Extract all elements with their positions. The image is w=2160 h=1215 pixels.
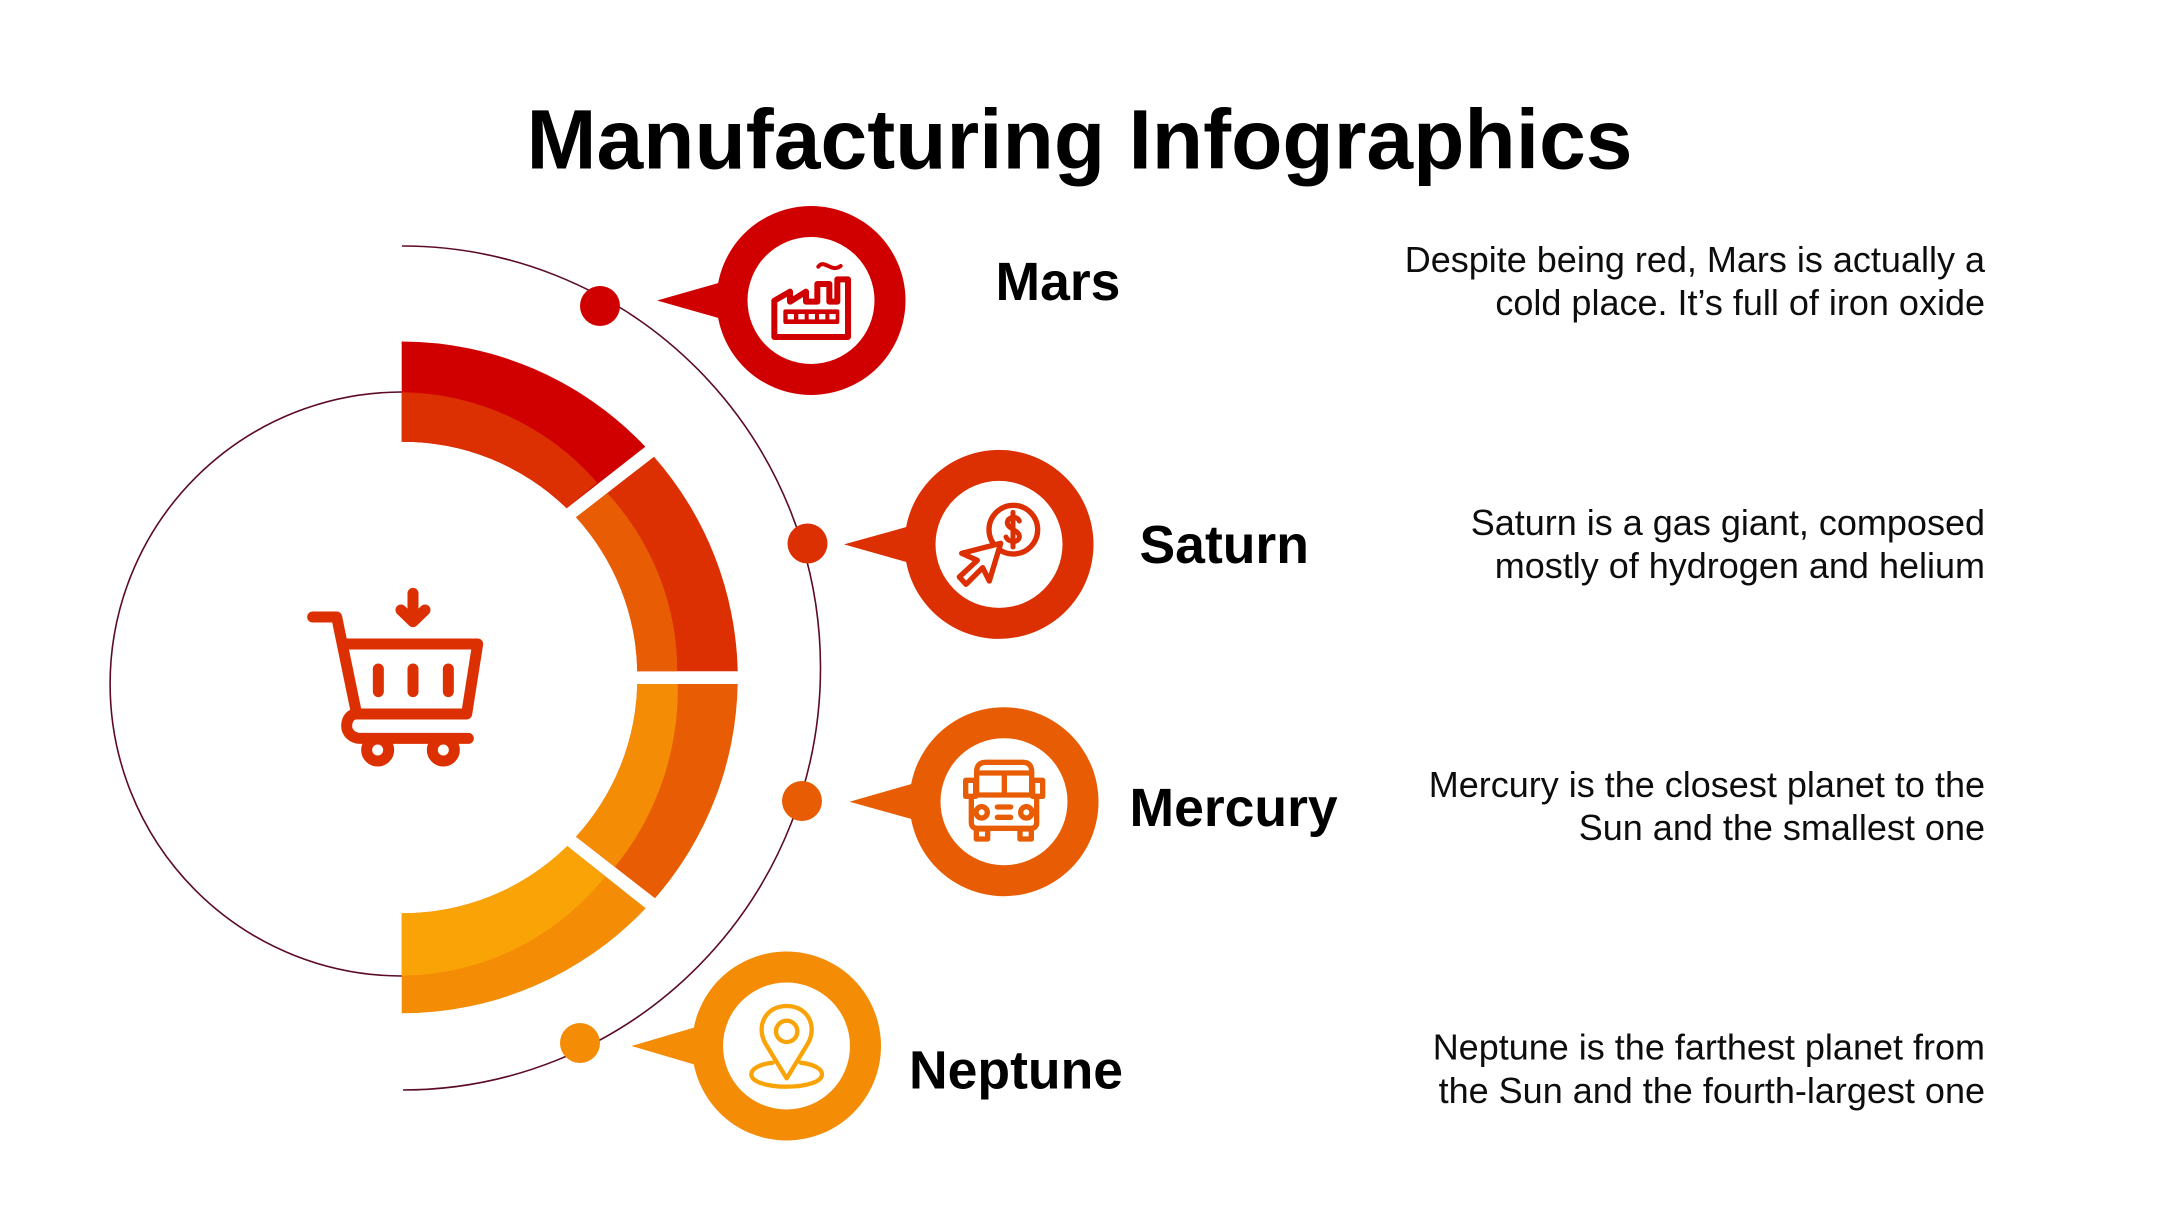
icon: factory — [774, 264, 848, 337]
description: Mercury: Sun and the smallest one — [1579, 807, 1985, 848]
label: Mars: Mars — [996, 253, 1120, 312]
title: Manufacturing Infographics — [526, 92, 1633, 186]
bubble: Saturn — [844, 450, 1094, 639]
bubble: Mars — [657, 206, 906, 395]
label: Neptune: Neptune — [909, 1042, 1123, 1100]
icon: dollar cursor — [959, 505, 1038, 584]
description: Saturn: Saturn is a gas giant, composed — [1471, 502, 1985, 543]
description: Saturn: mostly of hydrogen and helium — [1495, 545, 1985, 586]
segment 3: orange — [576, 684, 738, 898]
connector dot: Mercury — [782, 781, 822, 821]
thin inner half circle — [110, 392, 402, 976]
segment 2: red-orange — [576, 457, 738, 671]
segmented ring chart — [402, 342, 738, 1013]
description: Neptune: Neptune is the farthest planet from — [1433, 1026, 1985, 1068]
connector dot: Saturn — [788, 524, 828, 564]
connector dot: Mars — [580, 286, 620, 326]
description: Mercury: Mercury is the closest planet to the — [1429, 764, 1985, 805]
description: Mars: Despite being red, Mars is actually a — [1405, 239, 1986, 280]
icon: bus — [966, 762, 1043, 839]
icon: location pin — [751, 1006, 822, 1087]
description: Mars: cold place. It’s full of iron oxide — [1495, 282, 1985, 323]
segment 1: red — [402, 342, 645, 508]
icon: shopping cart — [313, 593, 478, 761]
segment 4: amber — [402, 846, 646, 1013]
label: Mercury: Mercury — [1130, 779, 1338, 838]
label: Saturn: Saturn — [1140, 516, 1309, 575]
bubble: Mercury — [850, 707, 1098, 896]
connector dot: Neptune — [560, 1023, 600, 1063]
thin outer arc — [402, 246, 821, 1090]
description: Neptune: the Sun and the fourth-largest one — [1439, 1070, 1985, 1111]
bubble: Neptune — [631, 952, 881, 1140]
